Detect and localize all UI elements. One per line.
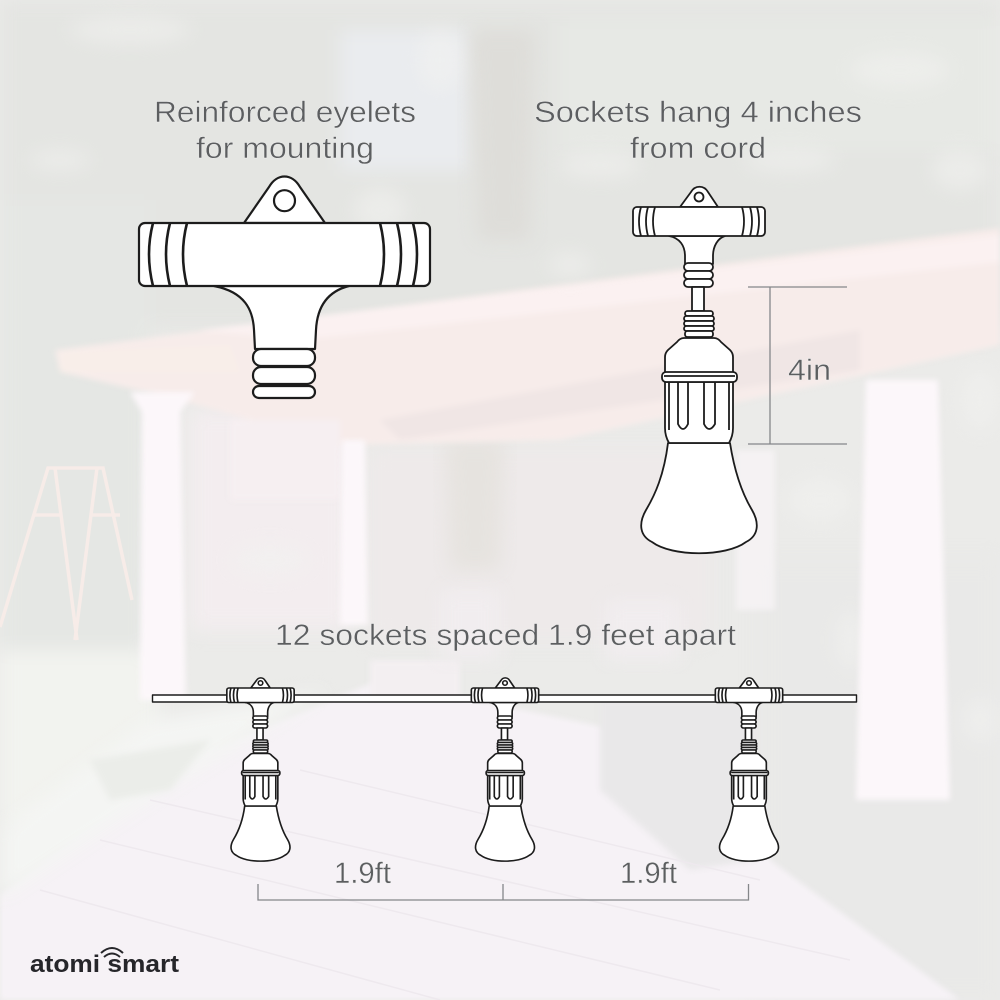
- dimension: 1.9 feet spacing: 1.9ft: [620, 857, 678, 890]
- floor deck: [0, 680, 960, 1000]
- heading: socket drop: Sockets hang 4 inches: [534, 96, 862, 129]
- columns: [130, 380, 950, 800]
- pergola roof: [55, 228, 1000, 500]
- heading: socket drop: from cord: [630, 132, 766, 165]
- logo: atomi smart: atomi smart: [30, 951, 179, 978]
- illustration: cord with three sockets: [152, 678, 856, 861]
- patio chairs: [440, 590, 680, 660]
- illustration: socket and bulb with drop length: [633, 187, 765, 553]
- socket 3: [715, 678, 783, 861]
- heading: reinforced eyelets: for mounting: [196, 132, 374, 165]
- swing frame: [0, 468, 132, 640]
- dimension: 1.9 feet spacing: 1.9ft: [334, 857, 392, 890]
- heading: socket spacing: 12 sockets spaced 1.9 feet apart: [275, 619, 737, 652]
- dimension: 1.9 feet spacing: [258, 857, 748, 900]
- heading: reinforced eyelets: Reinforced eyelets: [154, 96, 416, 129]
- illustration: enlarged eyelet connector: [139, 176, 430, 398]
- icon: wifi arcs: [101, 948, 123, 957]
- socket 1: [227, 678, 294, 861]
- socket 2: [471, 678, 539, 861]
- leaf highlights: [30, 16, 998, 742]
- dimension: 4 inch drop: [748, 287, 847, 444]
- dimension: 4 inch drop: 4in: [788, 354, 831, 387]
- cord: [152, 695, 856, 702]
